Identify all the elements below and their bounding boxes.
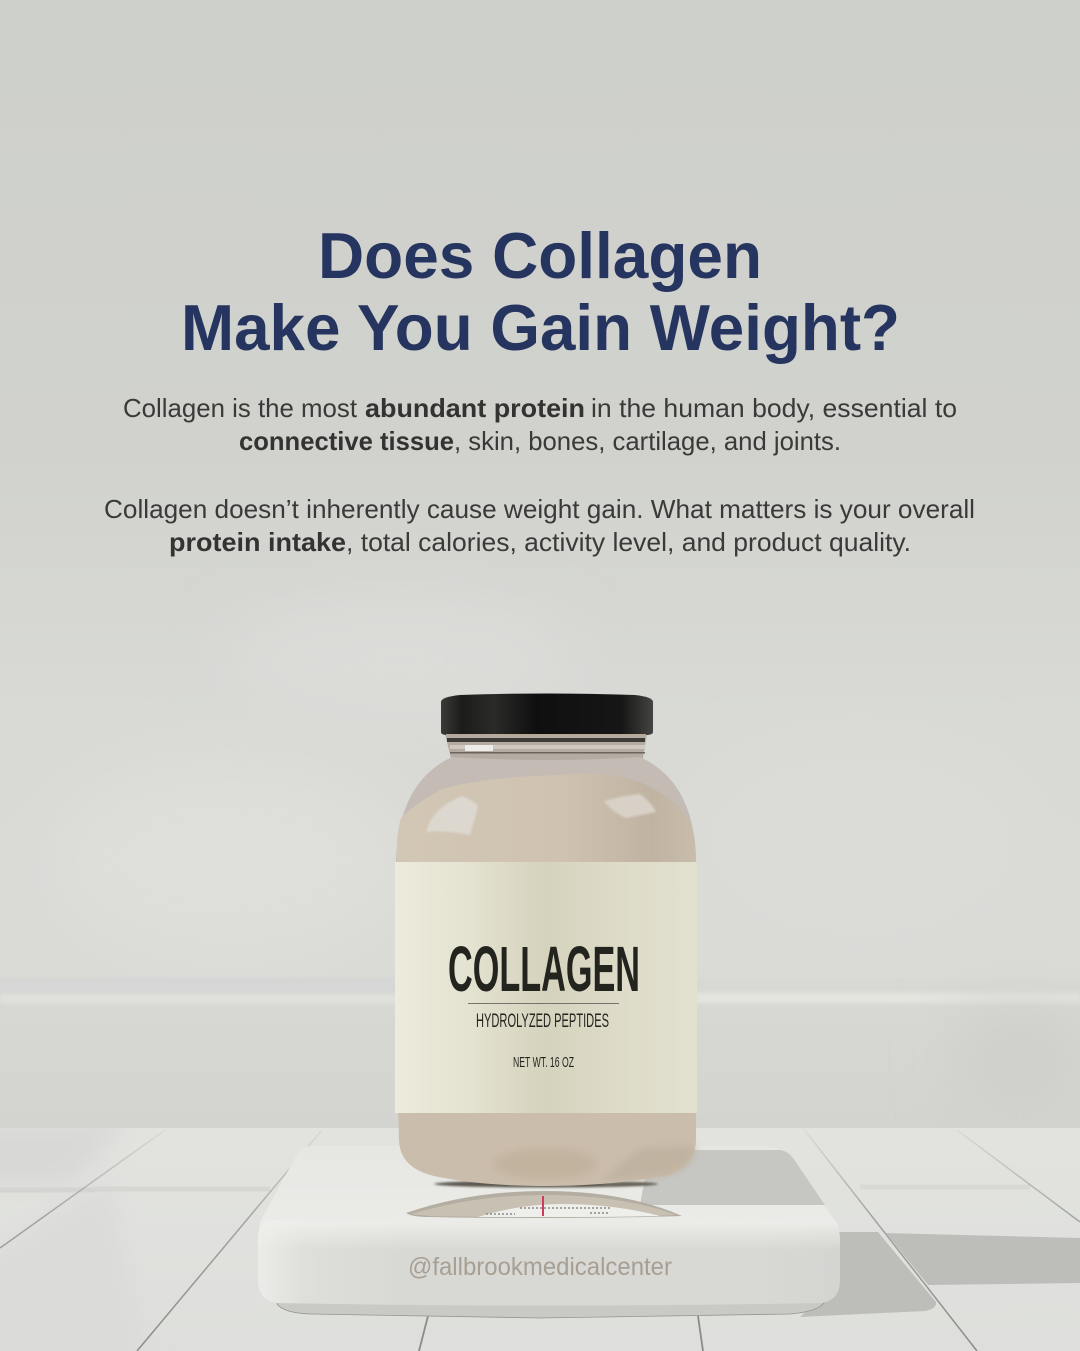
title (181, 219, 900, 364)
jar shoulder glass (396, 757, 696, 862)
scale dial window (406, 1191, 682, 1218)
scale shadow on floor (800, 1232, 1080, 1317)
intro paragraph: connective tissue (239, 426, 454, 456)
intro paragraph (123, 393, 957, 456)
shadow of jar on scale (640, 1150, 825, 1205)
label net weight: NET WT. 16 OZ (513, 1054, 574, 1071)
background: white plank floor (0, 1120, 1080, 1351)
intro paragraph: abundant protein (365, 393, 585, 423)
second paragraph: , total calories, activity level, and product quality. (346, 527, 911, 557)
jar powder upper (397, 774, 696, 862)
title: Does Collagen (318, 219, 762, 292)
jar contact shadow (434, 1180, 658, 1188)
bathroom scale (258, 1146, 840, 1318)
second paragraph: protein intake (169, 527, 346, 557)
label subtitle: HYDROLYZED PEPTIDES (476, 1011, 609, 1032)
label brand: COLLAGEN (448, 933, 640, 1005)
intro paragraph: , skin, bones, cartilage, and joints. (454, 426, 841, 456)
intro paragraph: in the human body, essential to (591, 393, 957, 423)
product label (395, 862, 697, 1113)
collagen jar (395, 694, 697, 1188)
social handle: @fallbrookmedicalcenter (408, 1253, 672, 1281)
label divider (468, 1003, 619, 1004)
second paragraph: Collagen doesn’t inherently cause weight gain. What matters is your overall (104, 494, 975, 524)
second paragraph (104, 494, 975, 557)
jar upper highlights (426, 796, 478, 835)
scale top surface (259, 1146, 838, 1240)
background: wall (0, 0, 1080, 1000)
background: baseboard (0, 978, 1080, 1128)
title: Make You Gain Weight? (181, 291, 900, 364)
scale front face (258, 1220, 840, 1306)
jar lid (441, 694, 653, 736)
intro paragraph: Collagen is the most (123, 393, 358, 423)
jar neck glass (445, 734, 647, 761)
jar lower powder (398, 1100, 696, 1186)
scale base plinth (276, 1296, 826, 1318)
